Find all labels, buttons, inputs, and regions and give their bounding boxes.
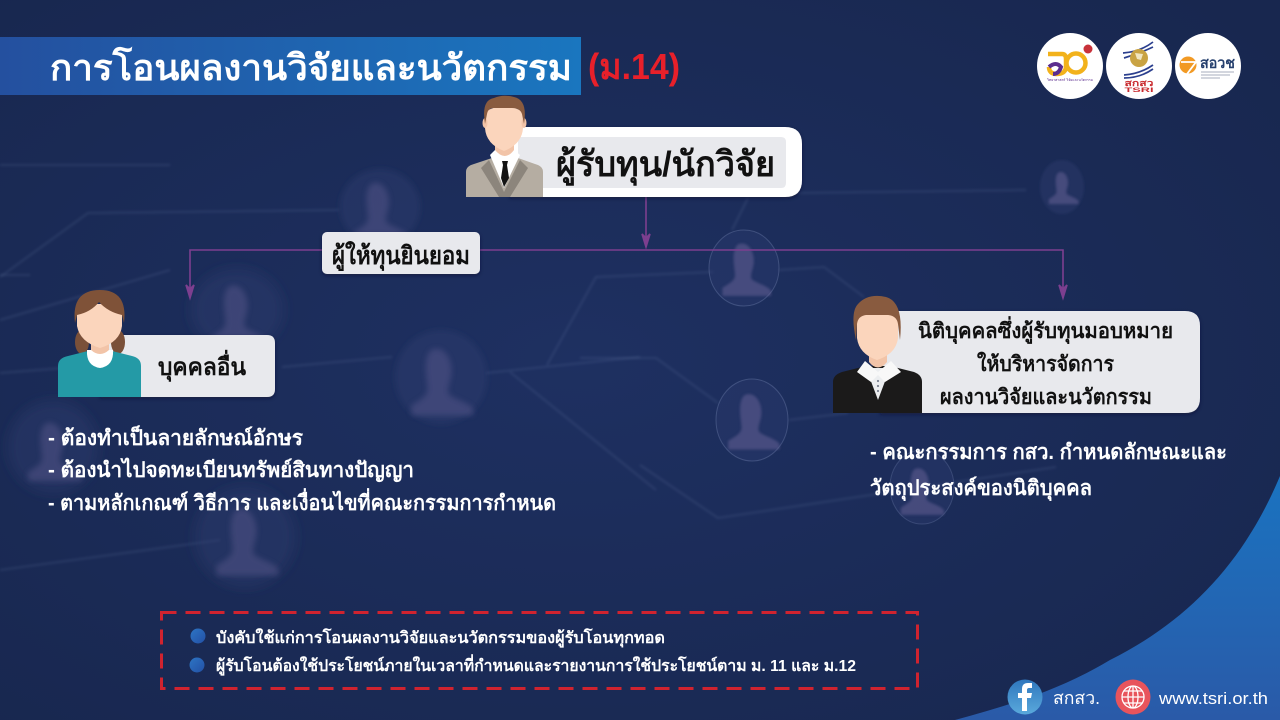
icon: facebook: [1008, 680, 1042, 714]
logo: NXPO: [1175, 33, 1241, 99]
legal entity box: ให้บริหารจัดการ: [977, 351, 1115, 376]
callout: dashed notes box: [162, 612, 918, 688]
recipient label: ผู้รับทุน/นักวิจัย: [556, 145, 775, 186]
conditions: other person: - ต้องทำเป็นลายลักษณ์อักษร: [48, 424, 304, 450]
blue corner shape: [955, 476, 1280, 720]
legal entity label: นิติบุคคลซึ่งผู้รับทุนมอบหมาย: [918, 315, 1173, 345]
conditions: other person: - ตามหลักเกณฑ์ วิธีการ และเงื่อนไขที่คณะกรรมการกำหนด: [48, 487, 556, 515]
icon: man in black sweater: [833, 296, 922, 413]
website: www.tsri.or.th: [1158, 689, 1268, 708]
title bar: [0, 37, 680, 95]
other person label: บุคคลอื่น: [158, 349, 247, 383]
logo: 30 years anniversary: วิทยาศาสตร์ วิจัยและนวัตกรรม: [1047, 78, 1093, 82]
note 1: บังคับใช้แก่การโอนผลงานวิจัยและนวัตกรรมของผู้รับโอนทุกทอด: [216, 627, 665, 649]
bullet: [190, 658, 204, 672]
other person box: [100, 335, 275, 397]
bullet: [190, 628, 206, 644]
logo: TSRI: [1106, 33, 1172, 99]
logo: TSRI: สกสว: [1124, 78, 1154, 88]
conditions: legal entity: วัตถุประสงค์ของนิติบุคคล: [870, 476, 1092, 502]
consent label: [322, 232, 480, 274]
icon: man in grey suit: [466, 96, 543, 197]
conditions: other person: [48, 424, 556, 515]
footer contacts: [1008, 680, 1268, 714]
conditions: legal entity: [870, 441, 1227, 502]
background network pattern: [0, 160, 1084, 587]
logo: NXPO: สอวช: [1200, 55, 1235, 72]
note 2: ผู้รับโอนต้องใช้ประโยชน์ภายในเวลาที่กำหนดและรายงานการใช้ประโยชน์ตาม ม. 11 และ ม.12: [216, 654, 856, 677]
connector lines and arrows: [186, 197, 1067, 298]
section reference: (ม.14): [588, 46, 680, 87]
icon: globe: [1116, 680, 1150, 714]
legal entity box: ผลงานวิจัยและนวัตกรรม: [940, 386, 1152, 409]
logo: TSRI: TSRI: [1124, 87, 1154, 94]
logos: [1037, 33, 1241, 99]
logo: 30 years anniversary: [1037, 33, 1103, 99]
facebook name: สกสว.: [1053, 688, 1100, 708]
title text: การโอนผลงานวิจัยและนวัตกรรม: [50, 46, 572, 88]
legal entity box: [880, 311, 1200, 413]
conditions: legal entity: - คณะกรรมการ กสว. กำหนดลักษณะและ: [870, 441, 1227, 464]
recipient box: [510, 127, 802, 197]
icon: woman in teal: [58, 290, 141, 397]
conditions: other person: - ต้องนำไปจดทะเบียนทรัพย์สินทางปัญญา: [48, 457, 414, 483]
consent label: ผู้ให้ทุนยินยอม: [332, 240, 470, 272]
